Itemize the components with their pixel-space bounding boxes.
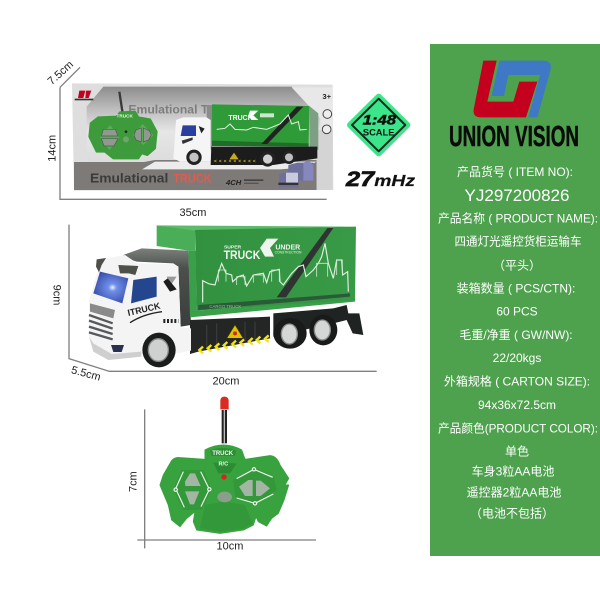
chevrons [199, 335, 269, 353]
truck length label: 20cm [213, 375, 239, 387]
centre button [217, 492, 232, 502]
logo: Union Vision mark [474, 61, 551, 117]
remote illustration: R/C [218, 462, 228, 468]
box depth label: 7.5cm [46, 59, 76, 88]
container top and side [157, 225, 356, 231]
truck depth label: 5.5cm [70, 364, 102, 384]
remote control with dimensions [128, 397, 316, 553]
city skyline [203, 243, 348, 302]
button markings [174, 468, 273, 507]
panel: product specification [430, 44, 600, 556]
cab rear fairing [123, 248, 191, 327]
truck illustration: TRUCK [224, 248, 261, 262]
truck on box: TRUCK [228, 115, 253, 122]
specification text [438, 164, 598, 520]
packaged toy box with dimensions [46, 59, 333, 219]
specification text: 产品颜色(PRODUCT COLOR): [438, 420, 598, 436]
truck height label: 9cm [51, 285, 63, 305]
truck on box: <<<<<<<<< [214, 158, 256, 163]
box packaging: 4CH [225, 178, 242, 187]
badge: 1:48 scale: 1:48 [363, 112, 396, 128]
truck dimension lines [69, 225, 377, 371]
container lower stripe [198, 293, 350, 310]
visor [96, 258, 138, 275]
truck on box [173, 104, 318, 167]
cargo label strip: CARGO TRUCK [209, 304, 241, 309]
specification text: 94x36x72.5cm [478, 398, 556, 412]
specification text: 产品名称 ( PRODUCT NAME): [438, 210, 598, 226]
box packaging: 3+ [322, 92, 332, 101]
specification text: 四通灯光遥控货柜运输车 [454, 234, 582, 248]
remote height label: 7cm [128, 471, 140, 492]
side window [131, 277, 157, 303]
box height label: 14cm [46, 135, 58, 162]
specification text: 外箱规格 ( CARTON SIZE): [444, 374, 590, 388]
box packaging: TRUCK [173, 172, 212, 186]
specification text: YJ297200826 [465, 186, 569, 205]
antenna [222, 410, 227, 443]
right buttons [239, 480, 253, 496]
cab body [89, 255, 191, 360]
specification text: 22/20kgs [493, 351, 541, 365]
remote on box: TRUCK [117, 114, 133, 119]
remote body [160, 445, 289, 533]
truck illustration: CONSTRUCTION [275, 251, 302, 255]
checker strip [163, 315, 178, 327]
remote width label: 10cm [217, 541, 243, 553]
remote on box [89, 92, 157, 158]
specification text: 单色 [505, 444, 529, 458]
container left face [157, 225, 195, 251]
left buttons [185, 473, 201, 486]
door text: ITRUCK [127, 301, 162, 318]
headlight [111, 345, 124, 352]
windshield [93, 272, 128, 303]
specification text: 产品货号 ( ITEM NO): [457, 164, 573, 179]
specification text: 毛重/净重 ( GW/NW): [459, 328, 573, 342]
purple truck illustration [278, 161, 313, 187]
specification text: 车身3粒AA电池 [472, 464, 554, 478]
lower chassis skirt [190, 317, 270, 354]
rear frame and mudguard [273, 305, 363, 337]
grille [89, 315, 113, 339]
badge: 1:48 scale: SCALE [363, 127, 394, 137]
container logo text: SUPER [224, 245, 242, 251]
truck illustration: UNDER [275, 244, 300, 251]
truck illustration [89, 225, 363, 367]
box width label: 35cm [180, 207, 206, 219]
specification text: 装箱数量 ( PCS/CTN): [457, 280, 575, 296]
remote illustration [160, 397, 289, 533]
box packaging: Emulational T [128, 102, 209, 116]
badge: 1:48 scale [350, 97, 407, 153]
diagonal container stripe [277, 228, 333, 297]
label: 27MHz: 27 mHz [345, 168, 415, 191]
door logo mark [167, 277, 177, 285]
rear wheels [273, 318, 307, 349]
specification text: （电池不包括） [470, 506, 554, 520]
remote label text: TRUCK [212, 451, 234, 457]
box packaging: Emulational [90, 171, 168, 186]
front wheel [142, 333, 176, 367]
box packaging [72, 83, 333, 191]
specification text: 60 PCS [496, 304, 538, 318]
specification text: 遥控器2粒AA电池 [467, 484, 561, 500]
remote dimension lines [137, 409, 316, 548]
indicator [221, 474, 227, 480]
specification text: （平头） [493, 258, 541, 272]
warning sign [227, 325, 243, 338]
box dimension lines [60, 67, 327, 199]
truck with dimensions [51, 225, 377, 387]
